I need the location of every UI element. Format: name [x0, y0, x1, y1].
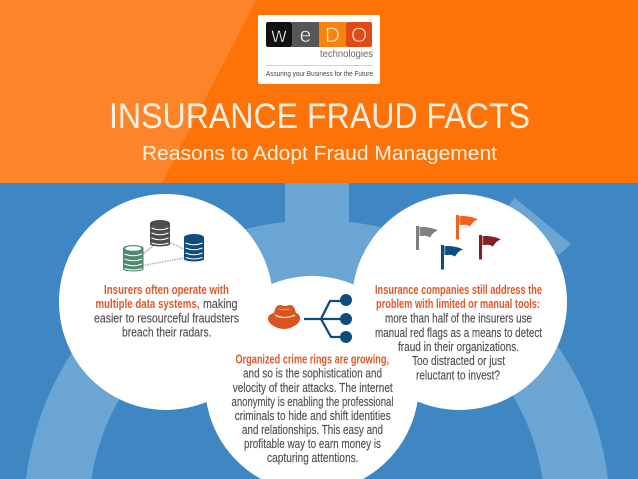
text block: crime rings: [232, 352, 394, 465]
text block: manual tools: manual red flags as a means to detect: [375, 325, 542, 340]
subtitle: Reasons to Adopt Fraud Management: [142, 143, 497, 165]
title: INSURANCE FRAUD FACTS: [109, 97, 530, 136]
flag: blue: [441, 245, 463, 270]
text block: manual tools: [375, 282, 542, 382]
text block: manual tools: reluctant to invest?: [416, 368, 500, 382]
icon: fedora hat: [268, 305, 300, 329]
text block: crime rings: velocity of their attacks. The internet: [233, 380, 393, 395]
logo: technologies: [320, 49, 373, 60]
text block: data systems: easier to resourceful fraudsters: [94, 310, 239, 326]
orange header band: [0, 0, 638, 183]
gear backdrop: [26, 183, 608, 479]
text block: manual tools: Too distracted or just: [412, 353, 505, 368]
logo: [258, 15, 380, 84]
text block: crime rings: anonymity is enabling the professional: [232, 394, 394, 409]
text block: data systems: Insurers often operate with: [104, 282, 229, 297]
logo: O: [351, 24, 367, 47]
logo: D: [325, 24, 340, 47]
text block: data systems: breach their radars.: [122, 324, 212, 340]
icon: connected databases: [123, 220, 204, 272]
flag: gray: [416, 226, 438, 250]
flag: maroon: [479, 235, 501, 260]
text block: data systems: [94, 282, 239, 340]
logo: Assuring your Business for the Future: [266, 71, 373, 78]
text block: crime rings: criminals to hide and shift identities: [235, 408, 391, 423]
icon: network branches: [304, 294, 352, 343]
text block: manual tools: more than half of the insurers use: [385, 310, 532, 326]
database: blue: [184, 234, 204, 262]
text block: manual tools: fraud in their organizations.: [398, 339, 519, 354]
text block: data systems: making: [203, 296, 238, 311]
logo: w: [270, 24, 287, 47]
text block: crime rings: profitable way to earn money is: [244, 436, 381, 451]
logo: e: [300, 24, 311, 47]
database: gray: [150, 220, 170, 246]
flag: orange: [456, 215, 478, 240]
text block: manual tools: problem with limited or manual tools:: [376, 296, 540, 311]
text block: data systems: multiple data systems,: [96, 296, 200, 311]
icon: red flags: [416, 215, 501, 270]
text block: crime rings: and relationships. This easy and: [242, 422, 383, 437]
database: green: [123, 245, 144, 272]
text block: crime rings: Organized crime rings are growing,: [236, 352, 389, 366]
panel: white circles: [59, 194, 567, 479]
text block: crime rings: and so is the sophistication and: [243, 366, 382, 380]
text block: crime rings: capturing attentions.: [267, 450, 358, 465]
text block: manual tools: Insurance companies still address the: [375, 282, 542, 297]
